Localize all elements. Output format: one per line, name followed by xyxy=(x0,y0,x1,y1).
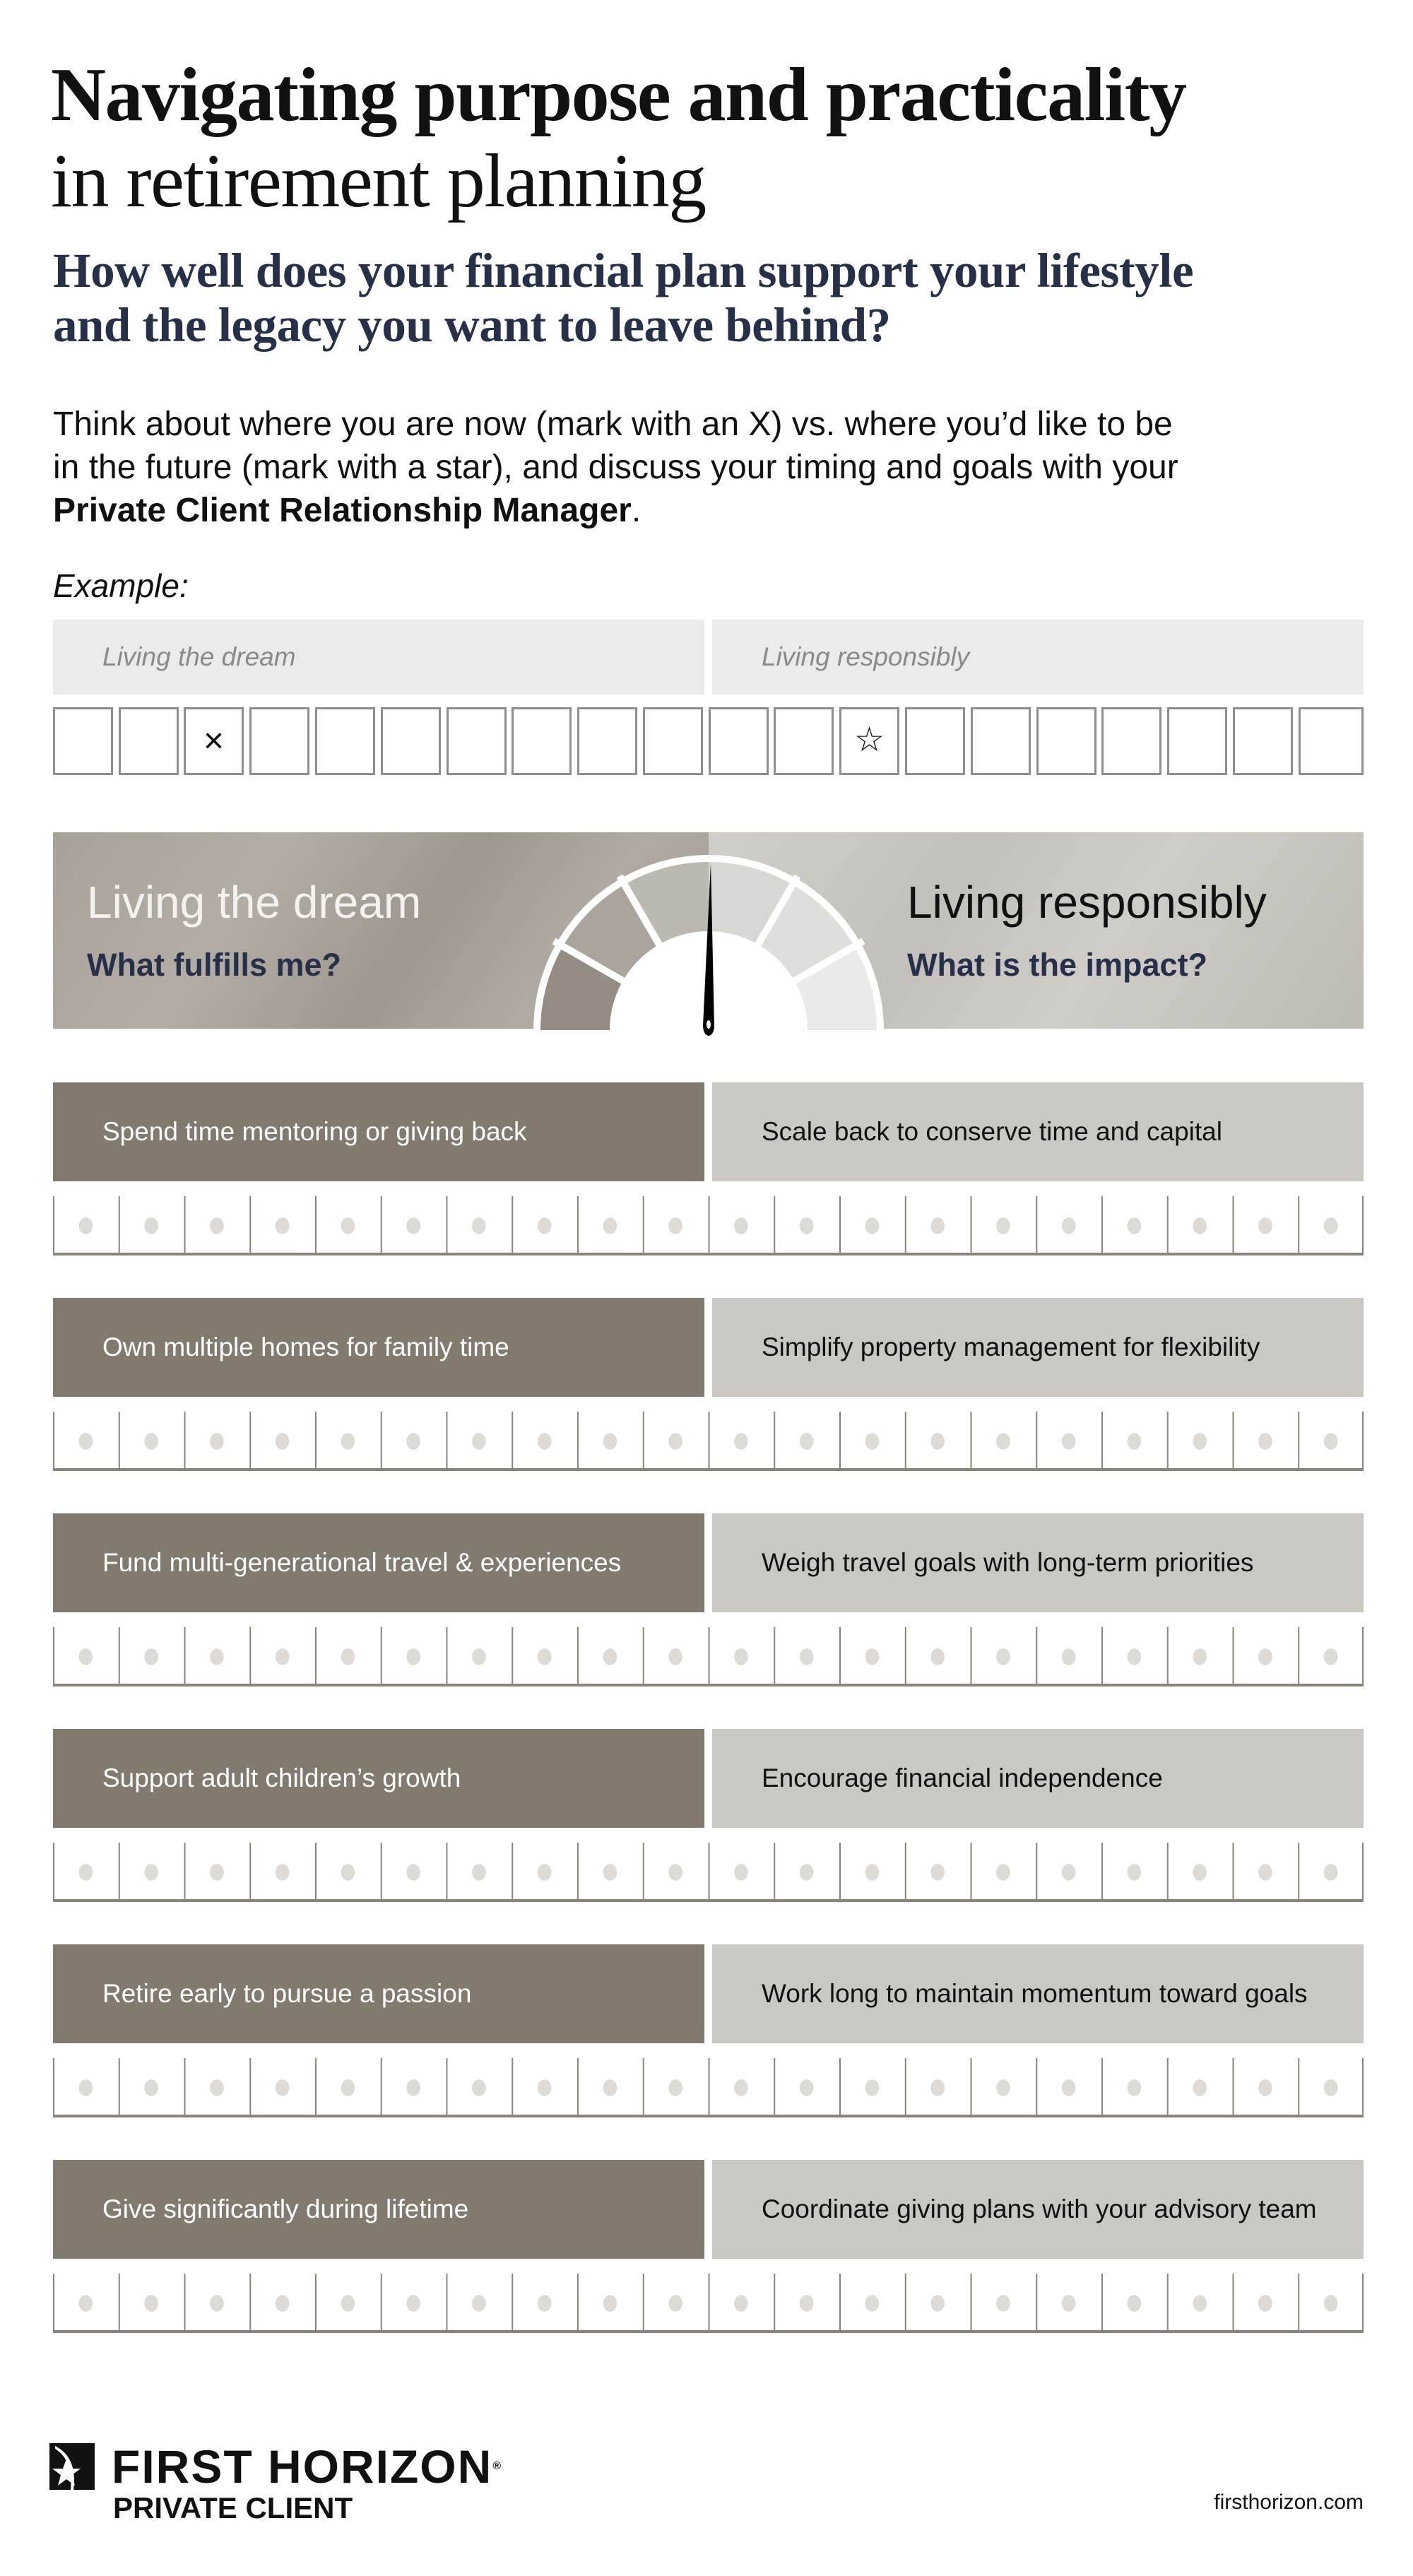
title: Navigating purpose and practicality xyxy=(51,53,1186,137)
sub brand: PRIVATE CLIENT xyxy=(113,2491,353,2524)
row 5: Retire early to pursue a passion xyxy=(102,1979,471,2008)
example label: Example: xyxy=(53,567,189,604)
right question: What is the impact? xyxy=(907,947,1207,983)
title: in retirement planning xyxy=(51,139,706,223)
right heading: Living responsibly xyxy=(907,877,1267,928)
row 6 xyxy=(53,2160,1364,2333)
row 5: Work long to maintain momentum toward goals xyxy=(762,1979,1308,2008)
row 3: Weigh travel goals with long-term priorities xyxy=(762,1548,1253,1577)
icon: star badge xyxy=(49,2443,95,2490)
instructions text: Private Client Relationship Manager. xyxy=(53,492,641,529)
left question: What fulfills me? xyxy=(87,947,341,983)
row 4: Support adult children’s growth xyxy=(102,1763,461,1792)
instructions text xyxy=(53,406,1178,529)
brand name: FIRST HORIZON® xyxy=(112,2440,502,2493)
website url: firsthorizon.com xyxy=(1214,2491,1364,2514)
gauge banner xyxy=(53,832,1364,1036)
row 6: Coordinate giving plans with your advisory team xyxy=(762,2194,1317,2223)
logo xyxy=(49,2440,502,2524)
needle xyxy=(703,863,714,1026)
example header bars xyxy=(53,620,1364,695)
example scale boxes xyxy=(53,707,1364,775)
row 4 xyxy=(53,1729,1364,1902)
row 1: Spend time mentoring or giving back xyxy=(102,1117,527,1146)
row 2: Own multiple homes for family time xyxy=(102,1333,509,1361)
left heading: Living the dream xyxy=(87,877,421,928)
subtitle question xyxy=(53,244,1193,352)
subtitle question: and the legacy you want to leave behind? xyxy=(53,298,891,352)
row 2 xyxy=(53,1298,1364,1471)
row 1 xyxy=(53,1082,1364,1255)
subtitle question: How well does your financial plan support your lifestyle xyxy=(53,244,1193,297)
row 1: Scale back to conserve time and capital xyxy=(762,1117,1222,1146)
example header bars: Living the dream xyxy=(102,642,296,671)
example scale boxes: × xyxy=(203,721,224,760)
instructions text: in the future (mark with a star), and discuss your timing and goals with your xyxy=(53,449,1178,486)
left texture panel xyxy=(53,832,709,1029)
right texture panel xyxy=(709,832,1364,1029)
instructions text: Think about where you are now (mark with an X) vs. where you’d like to be xyxy=(53,406,1173,443)
row 5 xyxy=(53,1944,1364,2117)
example header bars: Living responsibly xyxy=(762,642,969,671)
title xyxy=(51,53,1187,223)
row 3 xyxy=(53,1513,1364,1686)
gauge dial xyxy=(533,855,884,1036)
row 3: Fund multi-generational travel & experiences xyxy=(102,1548,621,1577)
row 2: Simplify property management for flexibility xyxy=(762,1333,1260,1361)
row 6: Give significantly during lifetime xyxy=(102,2194,468,2223)
row 4: Encourage financial independence xyxy=(762,1763,1163,1792)
example scale boxes: ☆ xyxy=(854,721,885,759)
